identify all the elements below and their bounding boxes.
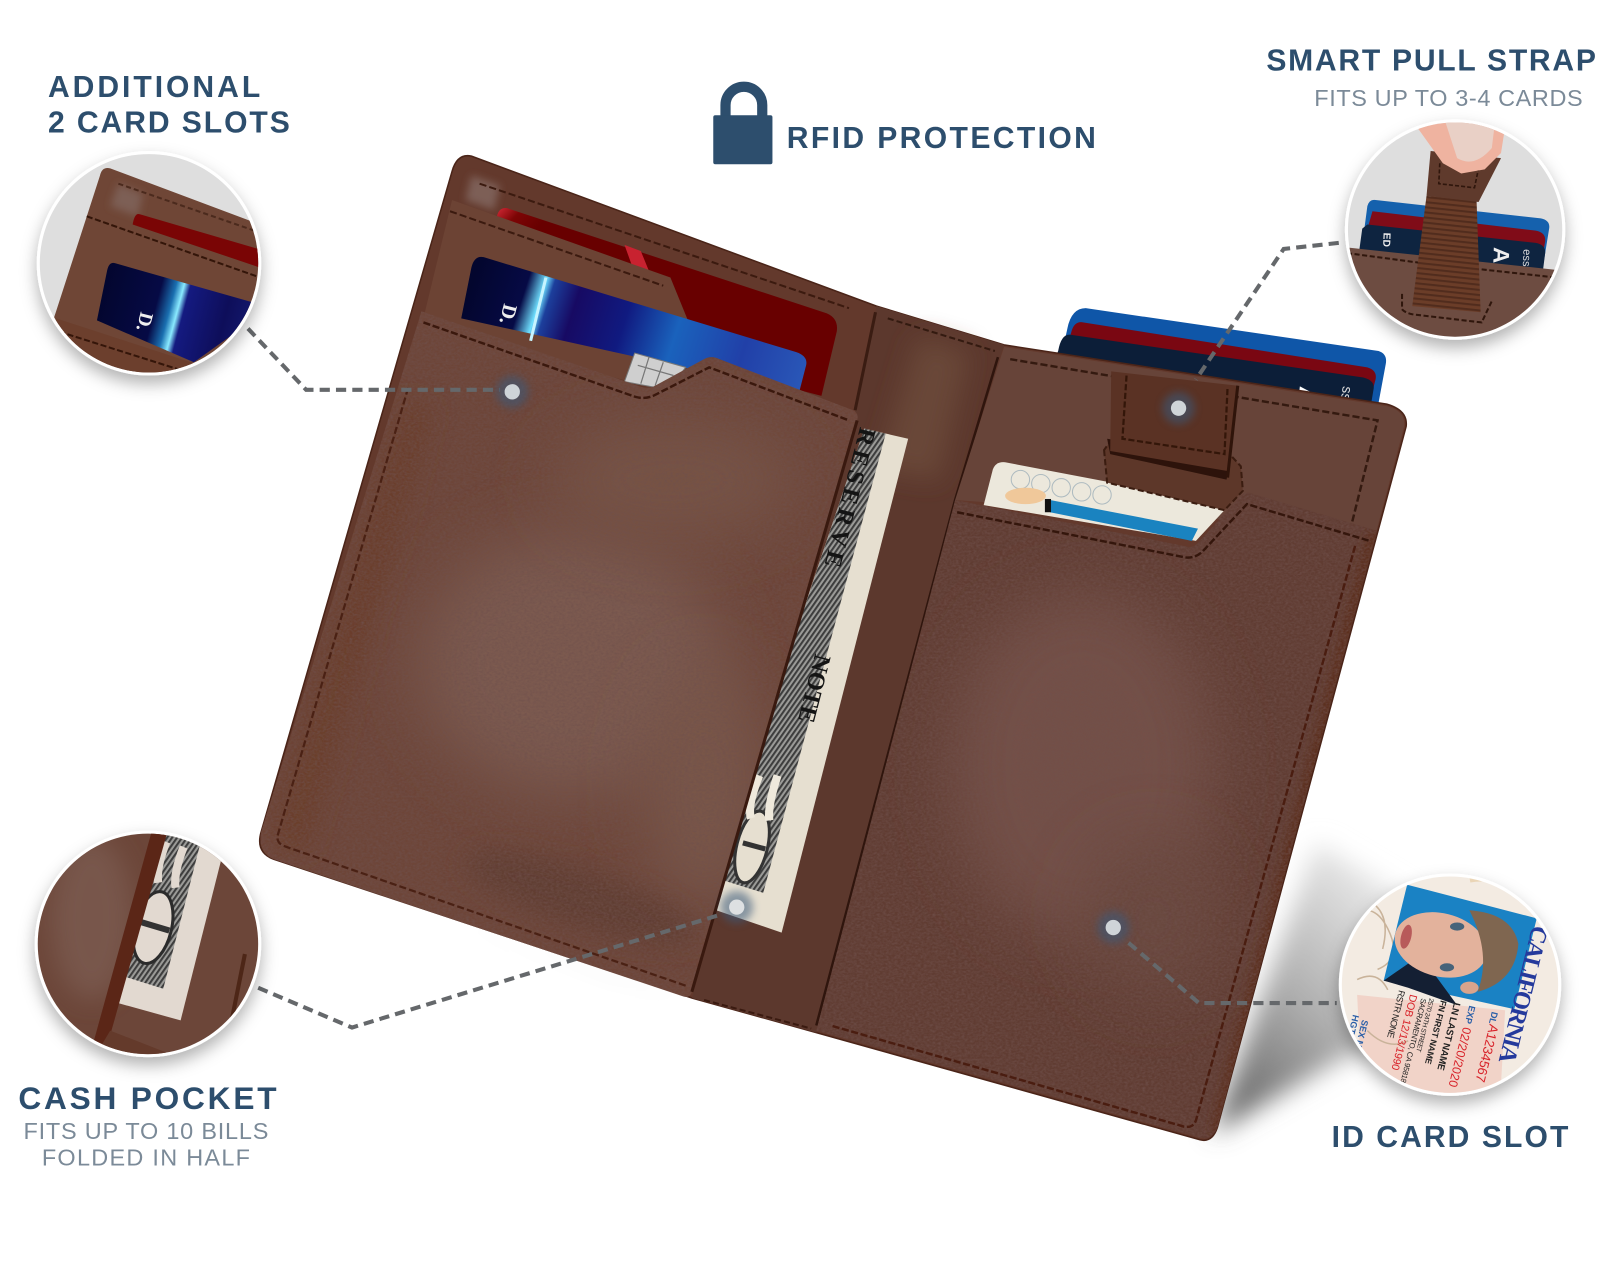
spine shading	[878, 337, 969, 480]
right pocket stitching	[957, 504, 1369, 558]
right upper panel	[955, 347, 1404, 531]
leader lines	[248, 243, 1339, 1028]
spine	[692, 306, 1004, 1033]
callout circle: pull strap: ED	[1380, 233, 1392, 247]
callout circle: id card: DL	[1487, 1011, 1500, 1025]
callout circle: id card: CALIFORNIA	[1493, 923, 1553, 1067]
heading: cash pocket: FITS UP TO 10 BILLS	[23, 1118, 268, 1144]
callout circle: id card: RSTR NONE	[1385, 989, 1407, 1039]
heading: cash pocket	[18, 1080, 277, 1170]
blue card left	[461, 257, 806, 393]
heading: rfid protection: RFID PROTECTION	[787, 122, 1096, 155]
right panel stitch	[1010, 359, 1378, 522]
back top band highlight	[465, 176, 500, 210]
lower spine edge	[704, 1000, 811, 1029]
marker: pull strap	[1162, 392, 1195, 424]
right front pocket	[806, 490, 1398, 1143]
blue card left: D.	[494, 302, 521, 326]
marker: id	[1097, 911, 1130, 944]
cards behind right panel: D	[1086, 359, 1105, 372]
left pocket stitching	[423, 322, 849, 420]
heading: smart pull strap: FITS UP TO 3-4 CARDS	[1314, 85, 1583, 111]
spine seam	[816, 357, 998, 1026]
callout circle: id card: A1234567	[1473, 1023, 1501, 1084]
callout circle: id card: FN FIRST NAME	[1423, 1000, 1449, 1066]
cards behind right panel	[1051, 308, 1386, 410]
heading: cash pocket: CASH POCKET	[18, 1080, 277, 1116]
callout circle: pull strap: A	[1488, 247, 1514, 264]
heading: smart pull strap	[1266, 44, 1596, 111]
callout circle: id card: SEX M	[1353, 1019, 1370, 1049]
callout circle: id card: HGT	[1346, 1014, 1361, 1035]
callout circle: id card	[1337, 872, 1566, 1102]
heading: cash pocket: FOLDED IN HALF	[42, 1144, 250, 1170]
inner leather layer	[421, 200, 689, 388]
floor shadow left	[408, 908, 704, 1005]
callout circle: id card: SACRAMENTO, CA 95818	[1399, 997, 1428, 1084]
bill: NOTE	[792, 652, 836, 725]
heading: id card slot: ID CARD SLOT	[1332, 1121, 1569, 1154]
id card peek	[984, 462, 1225, 541]
inner stitch	[450, 184, 849, 308]
heading: additional card slots: 2 CARD SLOTS	[48, 107, 290, 140]
cards behind right panel: ss	[1337, 385, 1355, 402]
pull tab	[1107, 371, 1238, 480]
heading: additional card slots	[48, 71, 290, 140]
cards behind right panel: A	[1292, 385, 1321, 406]
red card left	[480, 208, 837, 396]
bill: RESERVE	[819, 425, 881, 570]
bill	[704, 425, 908, 933]
wallet	[255, 156, 1406, 1143]
callout circle: id card: 2570 24TH STREET	[1414, 997, 1434, 1053]
marker: cash	[720, 891, 753, 923]
callout circle: card slots	[31, 143, 276, 388]
floor shadow right	[1212, 843, 1469, 1135]
pull tab recess	[1104, 439, 1243, 510]
callout circle: pull strap: ess	[1520, 249, 1532, 267]
left front pocket	[255, 306, 867, 1010]
icon: padlock	[713, 87, 772, 164]
callout circle: id card: LN LAST NAME	[1434, 1001, 1462, 1072]
wallet back silhouette	[260, 156, 1406, 1140]
callout circle: card slots: D.	[131, 310, 156, 333]
marker: card slots	[496, 376, 529, 408]
callout circle: pull strap	[1337, 112, 1571, 352]
heading: additional card slots: ADDITIONAL	[48, 71, 260, 104]
heading: smart pull strap: SMART PULL STRAP	[1266, 44, 1596, 77]
callout circle: id card: EXP	[1463, 1005, 1477, 1025]
callout circle: cash pocket	[31, 827, 265, 1061]
callout circle: id card: DOB 12/13/1990	[1389, 993, 1419, 1071]
callout circle: id card: 02/20/2020	[1445, 1026, 1474, 1089]
